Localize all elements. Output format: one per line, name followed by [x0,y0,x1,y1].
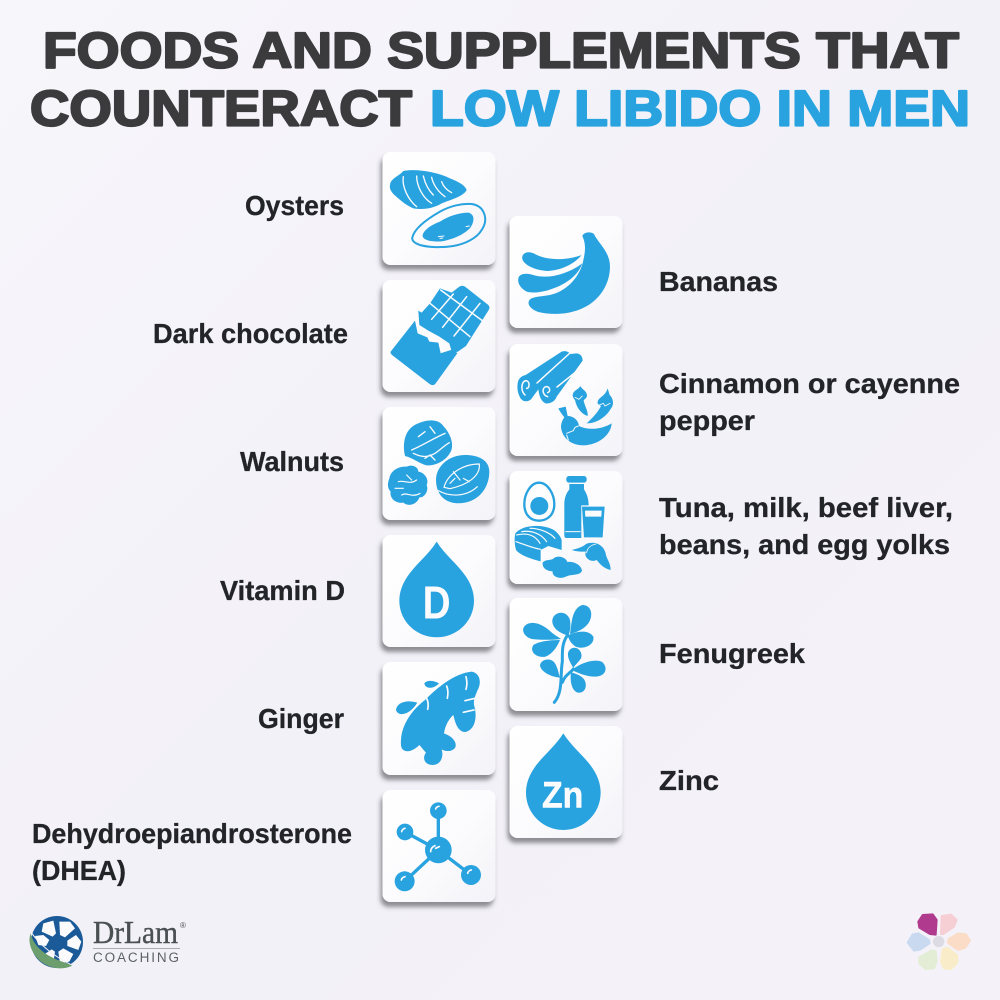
panel: ginger card [382,662,496,775]
panel: cinnamon and cayenne card [510,344,622,456]
logo: DrLam Coaching [29,914,186,968]
label: cinnamon or cayenne pepper [659,368,960,436]
label: cinnamon or cayenne pepper: pepper [659,405,755,436]
label: vitamin D: Vitamin D [220,575,345,606]
title [30,22,970,136]
panel: dark chocolate card [382,280,496,392]
panel: walnuts card [382,407,496,520]
label: DHEA: (DHEA) [32,855,126,886]
title: LOW LIBIDO IN MEN [430,80,970,136]
logo mark: pastel flower [908,914,970,969]
label: fenugreek: Fenugreek [659,638,806,669]
label: DHEA: Dehydroepiandrosterone [32,818,352,849]
label: cinnamon or cayenne pepper: Cinnamon or cayenne [659,368,960,399]
icon: walnuts [388,420,489,505]
panel: fenugreek card [510,598,622,711]
label: DHEA [32,818,352,886]
panel: vitamin D card [382,535,496,647]
panel: DHEA card [382,790,496,902]
icon: oysters [390,170,485,247]
panel: oysters card [382,152,496,265]
panel: bananas card [510,216,622,328]
label: ginger: Ginger [258,703,344,734]
icon: molecule [395,802,481,891]
panel: tuna, milk, liver, beans, egg card [510,471,622,584]
icon: tuna, milk, beef liver, beans and egg [515,476,611,578]
label: tuna, milk, beef liver, beans, and egg yolks: beans, and egg yolks [659,529,950,560]
icon: fenugreek [523,605,606,702]
icon: zinc drop: Zn [542,774,583,815]
label: walnuts: Walnuts [240,446,344,477]
label: zinc: Zinc [659,765,719,796]
icon: bananas [518,232,610,314]
title: COUNTERACT [30,80,412,136]
logo: DrLam Coaching: DrLam [93,914,178,950]
label: dark chocolate: Dark chocolate [153,318,348,349]
icon: cinnamon and chili peppers [517,351,613,445]
label: tuna, milk, beef liver, beans, and egg yolks [659,492,953,560]
icon: vitamin D drop: D [423,576,451,628]
title: FOODS AND SUPPLEMENTS THAT [43,22,959,78]
logo: DrLam Coaching: ® [180,921,186,930]
label: bananas: Bananas [659,266,778,297]
label: oysters: Oysters [245,190,344,221]
logo: DrLam Coaching: COACHING [93,950,179,965]
icon: dark chocolate [390,286,489,385]
panel: zinc card [510,726,622,838]
icon: ginger [396,672,480,765]
label: tuna, milk, beef liver, beans, and egg yolks: Tuna, milk, beef liver, [659,492,953,523]
